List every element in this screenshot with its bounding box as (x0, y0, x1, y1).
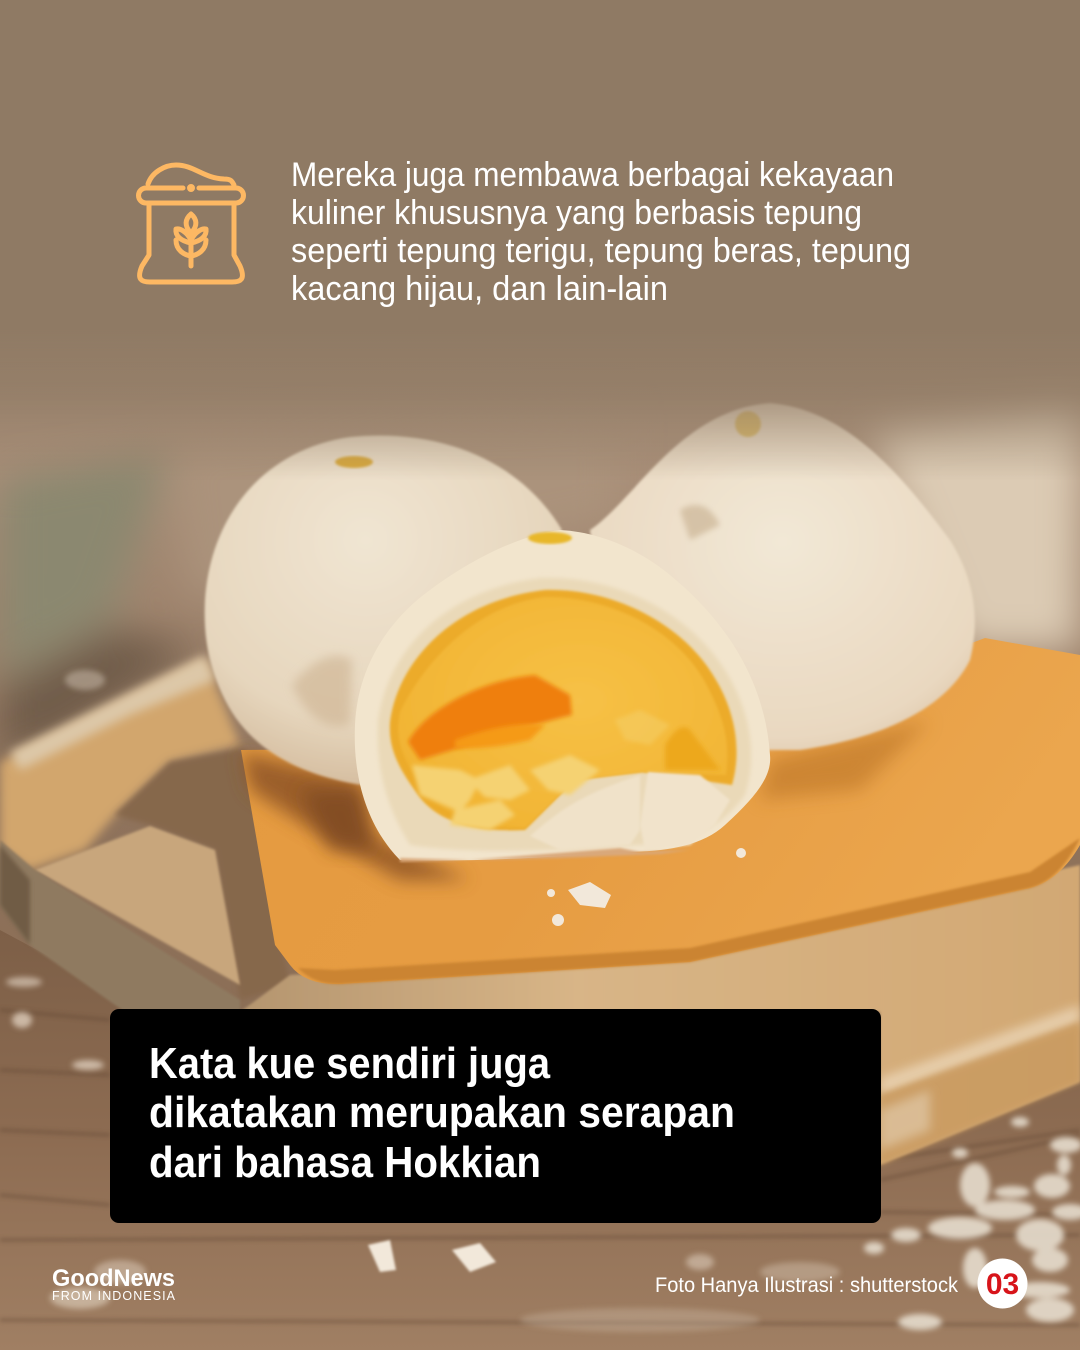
intro text block: kuliner khususnya yang berbasis tepung (291, 194, 862, 232)
logo: GoodNews from Indonesia: FROM INDONESIA (52, 1289, 176, 1303)
callout: black headline box: dari bahasa Hokkian (149, 1138, 541, 1187)
back right mooncake (590, 403, 975, 750)
shadow between boards (115, 748, 290, 1000)
salted egg yolk filling (390, 590, 737, 830)
main cutting board (240, 865, 1080, 1165)
intro text block (291, 156, 911, 308)
top brown overlay panel (0, 0, 1080, 480)
photo credit: Foto Hanya Ilustrasi : shutterstock (655, 1274, 958, 1297)
table planks at bottom (0, 930, 1080, 1350)
back left mooncake (205, 436, 562, 785)
intro text block: seperti tepung terigu, tepung beras, tepung (291, 232, 911, 270)
cut mooncake shell (355, 530, 770, 861)
lower-left plank (35, 826, 240, 985)
callout: black headline box: Kata kue sendiri juga (149, 1039, 550, 1088)
callout: black headline box (110, 1009, 881, 1223)
intro text block: kacang hijau, dan lain-lain (291, 270, 668, 308)
upper-left board (0, 660, 240, 870)
icon: flour sack (138, 165, 244, 282)
pastry folds at base (530, 775, 640, 850)
callout: black headline box: dikatakan merupakan serapan (149, 1088, 735, 1137)
page number badge (978, 1258, 1028, 1308)
intro text block: Mereka juga membawa berbagai kekayaan (291, 156, 894, 194)
flour crumbs (368, 848, 746, 1272)
blurred background table (0, 400, 1080, 760)
orange serving paddle (241, 638, 1080, 984)
logo: GoodNews from Indonesia: GoodNews (52, 1265, 175, 1292)
page number badge: 03 (986, 1268, 1019, 1301)
